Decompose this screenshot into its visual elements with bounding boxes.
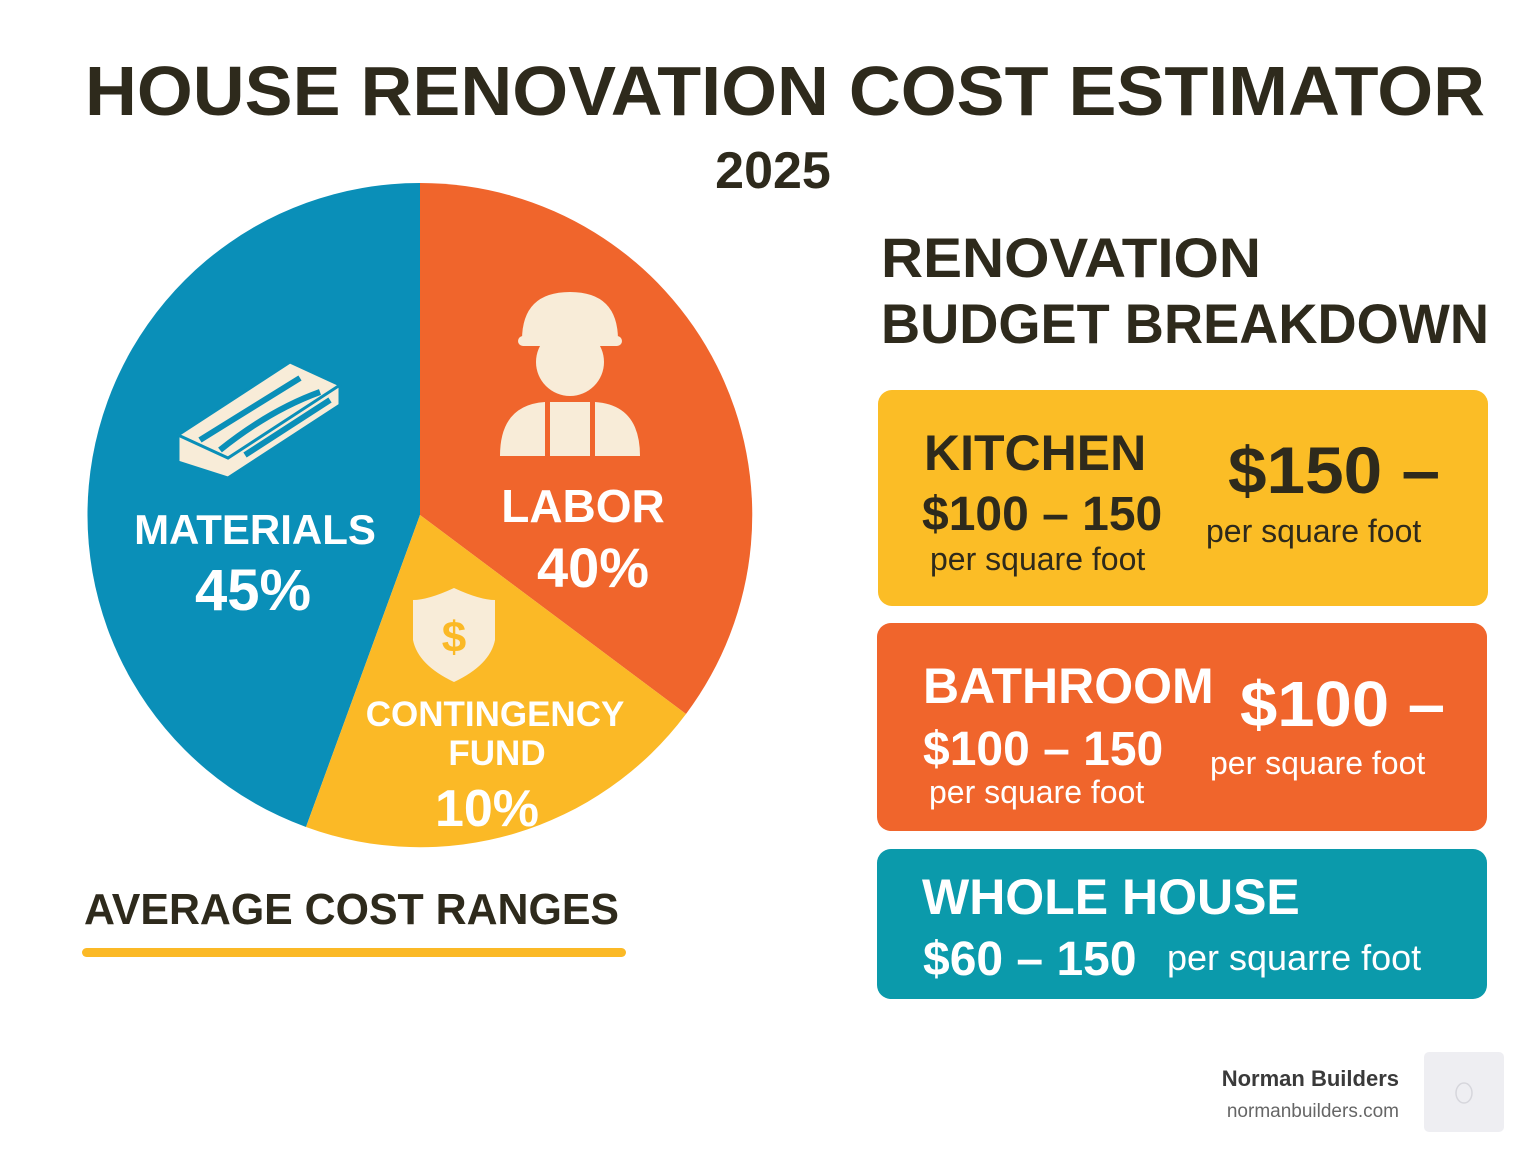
- pie chart: [87, 183, 752, 847]
- card: whole house: WHOLE HOUSE: [922, 869, 1300, 925]
- card: kitchen: per square foot: [1206, 513, 1421, 549]
- icon: lumber: [178, 362, 340, 478]
- card: kitchen: [878, 390, 1488, 606]
- slice: materials: [87, 183, 420, 827]
- label: materials: MATERIALS: [134, 506, 376, 553]
- card: whole house: [877, 849, 1487, 999]
- card: bathroom: $100 –: [1240, 668, 1445, 740]
- label: contingency: CONTINGENCY: [366, 695, 624, 734]
- icon: shield dollar: [413, 588, 495, 682]
- card: bathroom: BATHROOM: [923, 658, 1214, 714]
- subtitle year: 2025: [715, 142, 831, 200]
- footer: brand: [1222, 1052, 1504, 1132]
- card: whole house: per squarre foot: [1167, 937, 1421, 978]
- heading: budget breakdown: BUDGET BREAKDOWN: [881, 292, 1489, 355]
- title: HOUSE RENOVATION COST ESTIMATOR: [85, 52, 1485, 130]
- pie chart: 40%: [537, 536, 649, 599]
- heading: budget breakdown: [881, 226, 1489, 355]
- slice: labor: [420, 183, 752, 714]
- card: kitchen: $100 – 150: [922, 488, 1162, 541]
- heading: budget breakdown: RENOVATION: [881, 226, 1261, 289]
- pie chart: FUND: [448, 734, 546, 773]
- icon: worker: [500, 292, 640, 456]
- heading: average cost ranges: [82, 885, 626, 957]
- label: labor: LABOR: [501, 480, 665, 532]
- card: kitchen: $150 –: [1228, 433, 1440, 507]
- slice: contingency: [306, 515, 686, 847]
- pie chart: 10%: [435, 780, 539, 838]
- footer: brand: Norman Builders: [1222, 1066, 1399, 1091]
- icon: logo placeholder: [1424, 1052, 1504, 1132]
- card: bathroom: $100 – 150: [923, 723, 1163, 776]
- card: bathroom: per square foot: [1210, 745, 1425, 781]
- heading: average cost ranges: AVERAGE COST RANGES: [84, 885, 619, 934]
- card: kitchen: KITCHEN: [924, 425, 1146, 481]
- pie chart: 45%: [195, 558, 311, 623]
- card: kitchen: per square foot: [930, 541, 1145, 577]
- footer: brand: normanbuilders.com: [1227, 1101, 1399, 1122]
- card: bathroom: per square foot: [929, 774, 1144, 810]
- icon: shield dollar: $: [442, 613, 466, 662]
- card: bathroom: [877, 623, 1487, 831]
- card: whole house: $60 – 150: [923, 933, 1137, 986]
